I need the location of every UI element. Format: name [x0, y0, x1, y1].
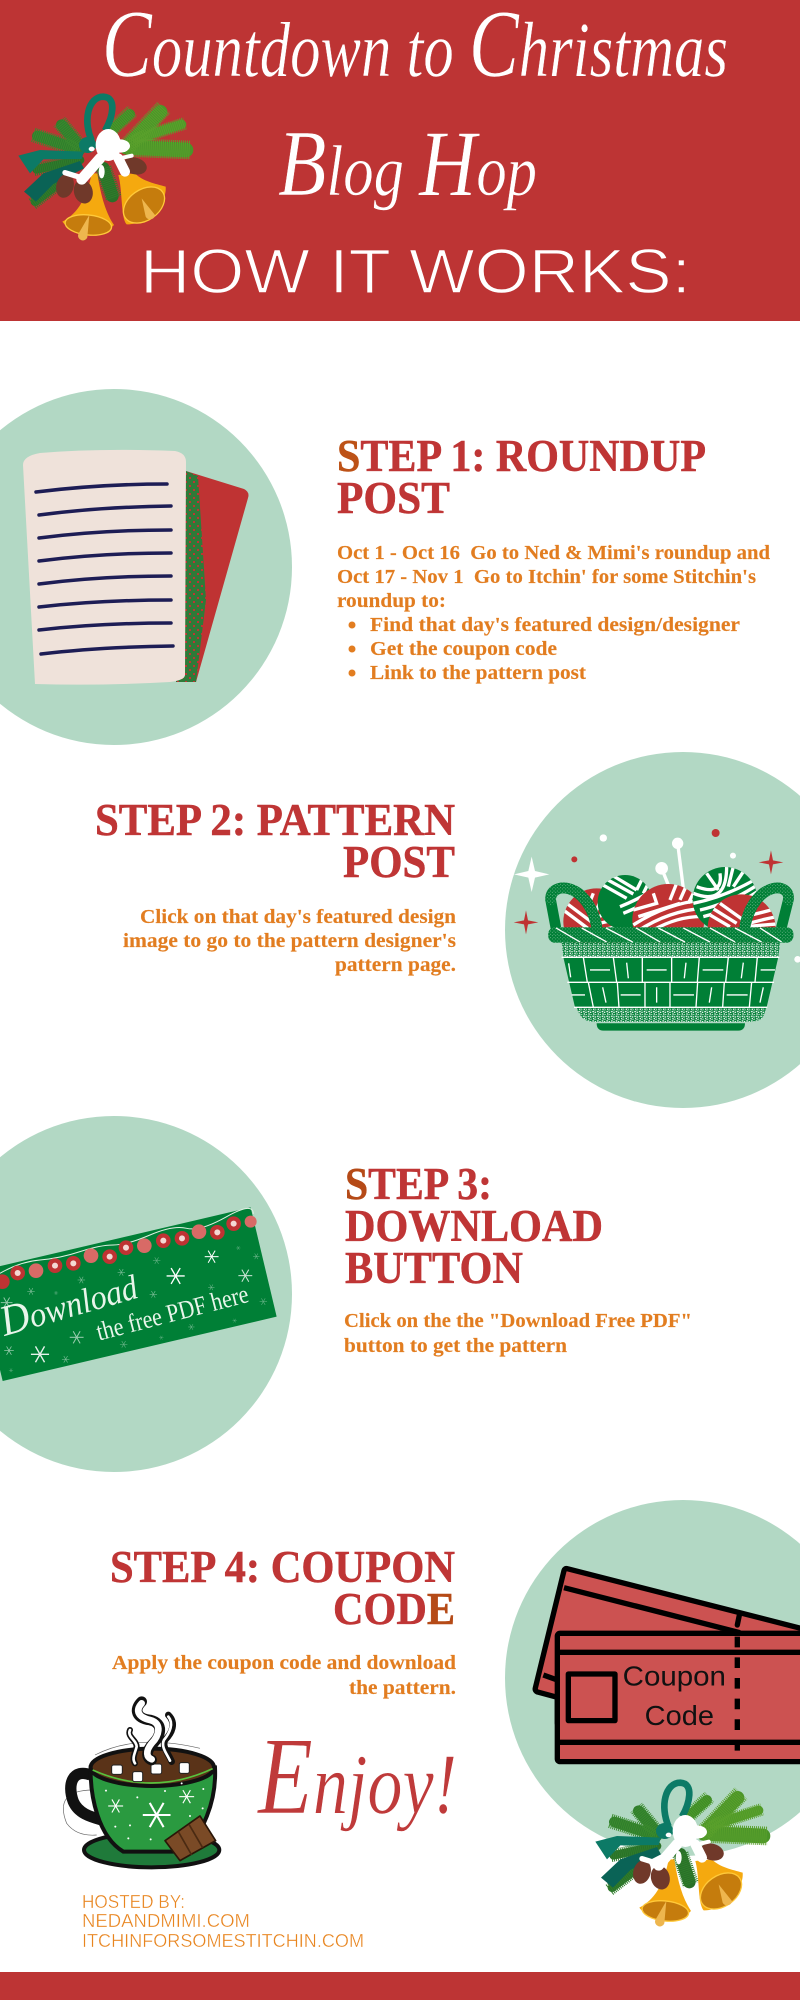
text: step 4 body: Apply the coupon code and download: [112, 1652, 456, 1674]
text: step 3 body: [344, 1310, 692, 1357]
yarn balls: [563, 867, 776, 943]
text: step 1 body: Link to the pattern post: [370, 662, 586, 684]
basket body: [548, 927, 793, 1031]
circle: step 2 background: [505, 752, 800, 1108]
text: step 2 body: pattern page.: [335, 954, 456, 976]
heading: step 1: POST: [337, 473, 450, 523]
panel: step 2: [95, 752, 800, 1108]
text: hosted by: ITCHINFORSOMESTITCHIN.COM: [82, 1930, 364, 1951]
heading: step 3: STEP 3:: [345, 1159, 492, 1209]
heading: step 1: [337, 431, 706, 523]
circle: step 3 background: [0, 1116, 292, 1472]
circle: step 4 background: [505, 1500, 800, 1856]
icon: cocoa cup: [63, 1702, 219, 1867]
heading: step 2: [95, 795, 455, 887]
icon: yarn basket: [514, 829, 800, 1031]
title: Blog Hop: Blog Hop: [278, 112, 537, 216]
panel: step 4: [110, 1500, 800, 1856]
icon: bells ornament (top): [18, 97, 191, 240]
heading: how it works: HOW IT WORKS:: [140, 237, 691, 307]
footer band: [0, 1972, 800, 2000]
text: step 2 body: image to go to the pattern designer's: [123, 930, 456, 952]
text: step 1 body: Oct 1 - Oct 16 Go to Ned & Mimi's roundup and: [337, 542, 770, 564]
handles: [551, 888, 789, 927]
header band: [0, 0, 800, 321]
icon: document stack: [23, 450, 248, 685]
icon: download button banner: the free PDF here: [93, 1279, 252, 1346]
steam: [129, 1702, 173, 1763]
text: Enjoy: Enjoy!: [256, 1715, 457, 1837]
heading: step 2: POST: [343, 837, 455, 887]
text: step 1 body: [337, 542, 770, 684]
text: hosted by: HOSTED BY:: [82, 1891, 185, 1912]
text: hosted by: NEDANDMIMI.COM: [82, 1910, 250, 1931]
heading: step 4: CODE: [333, 1584, 455, 1634]
icon: coupon tickets: [535, 1569, 800, 1762]
heading: step 1: STEP 1: ROUNDUP: [337, 431, 706, 481]
text: step 2 body: Click on that day's featured design: [140, 906, 456, 928]
text: step 3 body: Click on the the "Download Free PDF": [344, 1310, 692, 1332]
text: hosted by: [82, 1891, 364, 1951]
text: step 1 body: roundup to:: [337, 590, 446, 612]
snowflakes: [1, 1246, 267, 1372]
text: step 2 body: [123, 906, 456, 976]
text: step 4 body: [112, 1652, 456, 1699]
chocolate bar: [165, 1816, 216, 1861]
panel: step 1: [0, 389, 770, 745]
heading: step 3: BUTTON: [345, 1243, 523, 1293]
circle: step 1 background: [0, 389, 292, 745]
text: step 3 body: button to get the pattern: [344, 1335, 567, 1357]
heading: step 2: STEP 2: PATTERN: [95, 795, 455, 845]
text: step 1 body: Oct 17 - Nov 1 Go to Itchin' for some Stitchin's: [337, 566, 756, 588]
heading: step 4: [110, 1542, 455, 1634]
panel: step 3: [0, 1116, 692, 1472]
text: step 4 body: the pattern.: [349, 1677, 456, 1699]
text: step 1 body: Get the coupon code: [370, 638, 557, 660]
heading: step 4: STEP 4: COUPON: [110, 1542, 455, 1592]
icon: bells ornament (bottom): [595, 1783, 768, 1926]
text: step 1 body: Find that day's featured design/designer: [370, 614, 740, 636]
heading: step 3: DOWNLOAD: [345, 1201, 603, 1251]
icon: coupon tickets: Code: [645, 1700, 714, 1731]
icon: coupon tickets: Coupon: [623, 1661, 726, 1692]
snowflakes on cup: [105, 1782, 204, 1840]
icon: download button banner: [0, 1207, 277, 1381]
heading: step 3: [345, 1159, 603, 1293]
